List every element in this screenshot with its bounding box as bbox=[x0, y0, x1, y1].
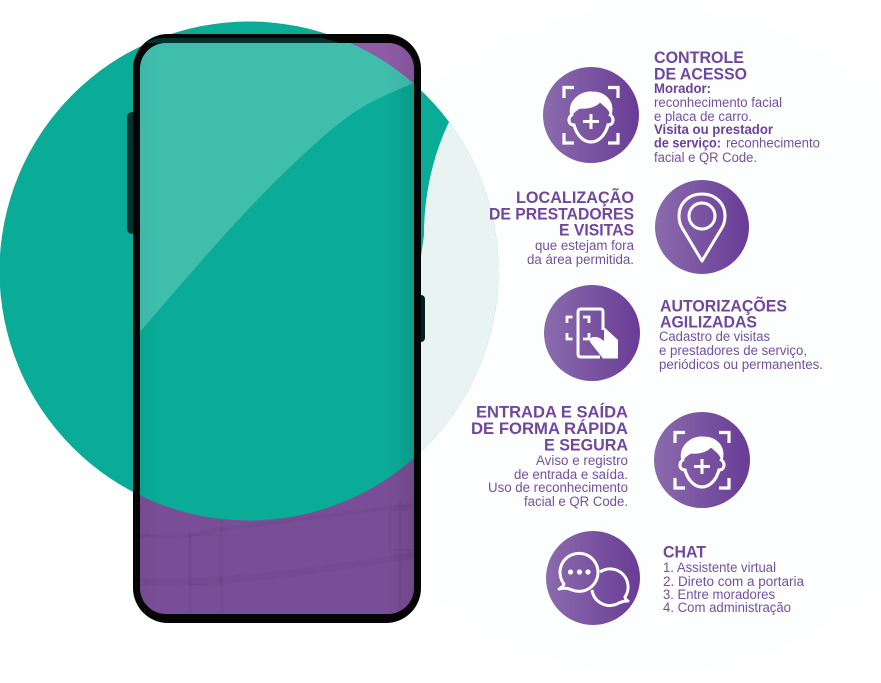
icon: chat bubbles bbox=[546, 531, 640, 625]
text: localização: LOCALIZAÇÃO bbox=[516, 187, 634, 207]
text: localização bbox=[489, 187, 634, 267]
text: entrada e saída: facial e QR Code. bbox=[524, 494, 628, 509]
icon: face recognition 2 bbox=[654, 412, 750, 508]
text: controle de acesso: e placa de carro. bbox=[654, 109, 752, 124]
text: autorizações: e prestadores de serviço, bbox=[659, 343, 807, 358]
text: chat: 3. Entre moradores bbox=[663, 587, 775, 602]
text: autorizações: periódicos ou permanentes. bbox=[659, 357, 823, 372]
text: chat: 2. Direto com a portaria bbox=[663, 574, 804, 589]
text: autorizações: AUTORIZAÇÕES bbox=[660, 296, 787, 316]
phone screen bbox=[140, 43, 414, 614]
text: entrada e saída: Aviso e registro bbox=[536, 453, 628, 468]
text: controle de acesso bbox=[654, 48, 820, 165]
text: chat: 4. Com administração bbox=[663, 600, 791, 615]
text: controle de acesso: facial e QR Code. bbox=[654, 150, 757, 165]
text: autorizações bbox=[659, 296, 823, 372]
text: controle de acesso: Morador: bbox=[654, 81, 711, 96]
text: localização: da área permitida. bbox=[527, 252, 634, 267]
text: entrada e saída: ENTRADA E SAÍDA bbox=[476, 402, 628, 422]
text: entrada e saída bbox=[471, 402, 628, 509]
phone side buttons bbox=[127, 112, 425, 342]
icon: phone in hand bbox=[544, 285, 640, 381]
text: entrada e saída: E SEGURA bbox=[544, 436, 628, 454]
text: entrada e saída: DE FORMA RÁPIDA bbox=[471, 419, 628, 438]
phone bbox=[127, 34, 425, 623]
text: controle de acesso: Visita ou prestador bbox=[654, 122, 774, 137]
text: controle de acesso: de serviço: bbox=[654, 136, 721, 150]
bezel teal tint bbox=[146, 38, 340, 43]
icon: map pin bbox=[655, 180, 749, 274]
phone body bbox=[133, 34, 421, 623]
text: autorizações: Cadastro de visitas bbox=[659, 329, 770, 344]
text: controle de acesso: CONTROLE bbox=[654, 48, 744, 67]
icon: face recognition 1 bbox=[543, 67, 639, 163]
page background glow bbox=[315, 5, 881, 675]
teal background circle bbox=[0, 22, 498, 492]
text: chat bbox=[663, 542, 804, 615]
text: chat: 1. Assistente virtual bbox=[663, 560, 776, 575]
text: localização: que estejam fora bbox=[535, 238, 634, 253]
text: localização: E VISITAS bbox=[559, 220, 634, 240]
text: entrada e saída: de entrada e saída. bbox=[514, 467, 628, 482]
text: controle de acesso: DE ACESSO bbox=[654, 64, 747, 84]
text: entrada e saída: Uso de reconhecimento bbox=[488, 480, 628, 495]
text: localização: DE PRESTADORES bbox=[489, 204, 634, 224]
text: controle de acesso: reconhecimento facial bbox=[654, 95, 782, 110]
text: autorizações: AGILIZADAS bbox=[660, 312, 757, 332]
text: controle de acesso: reconhecimento bbox=[726, 136, 820, 150]
text: chat: CHAT bbox=[663, 542, 707, 562]
